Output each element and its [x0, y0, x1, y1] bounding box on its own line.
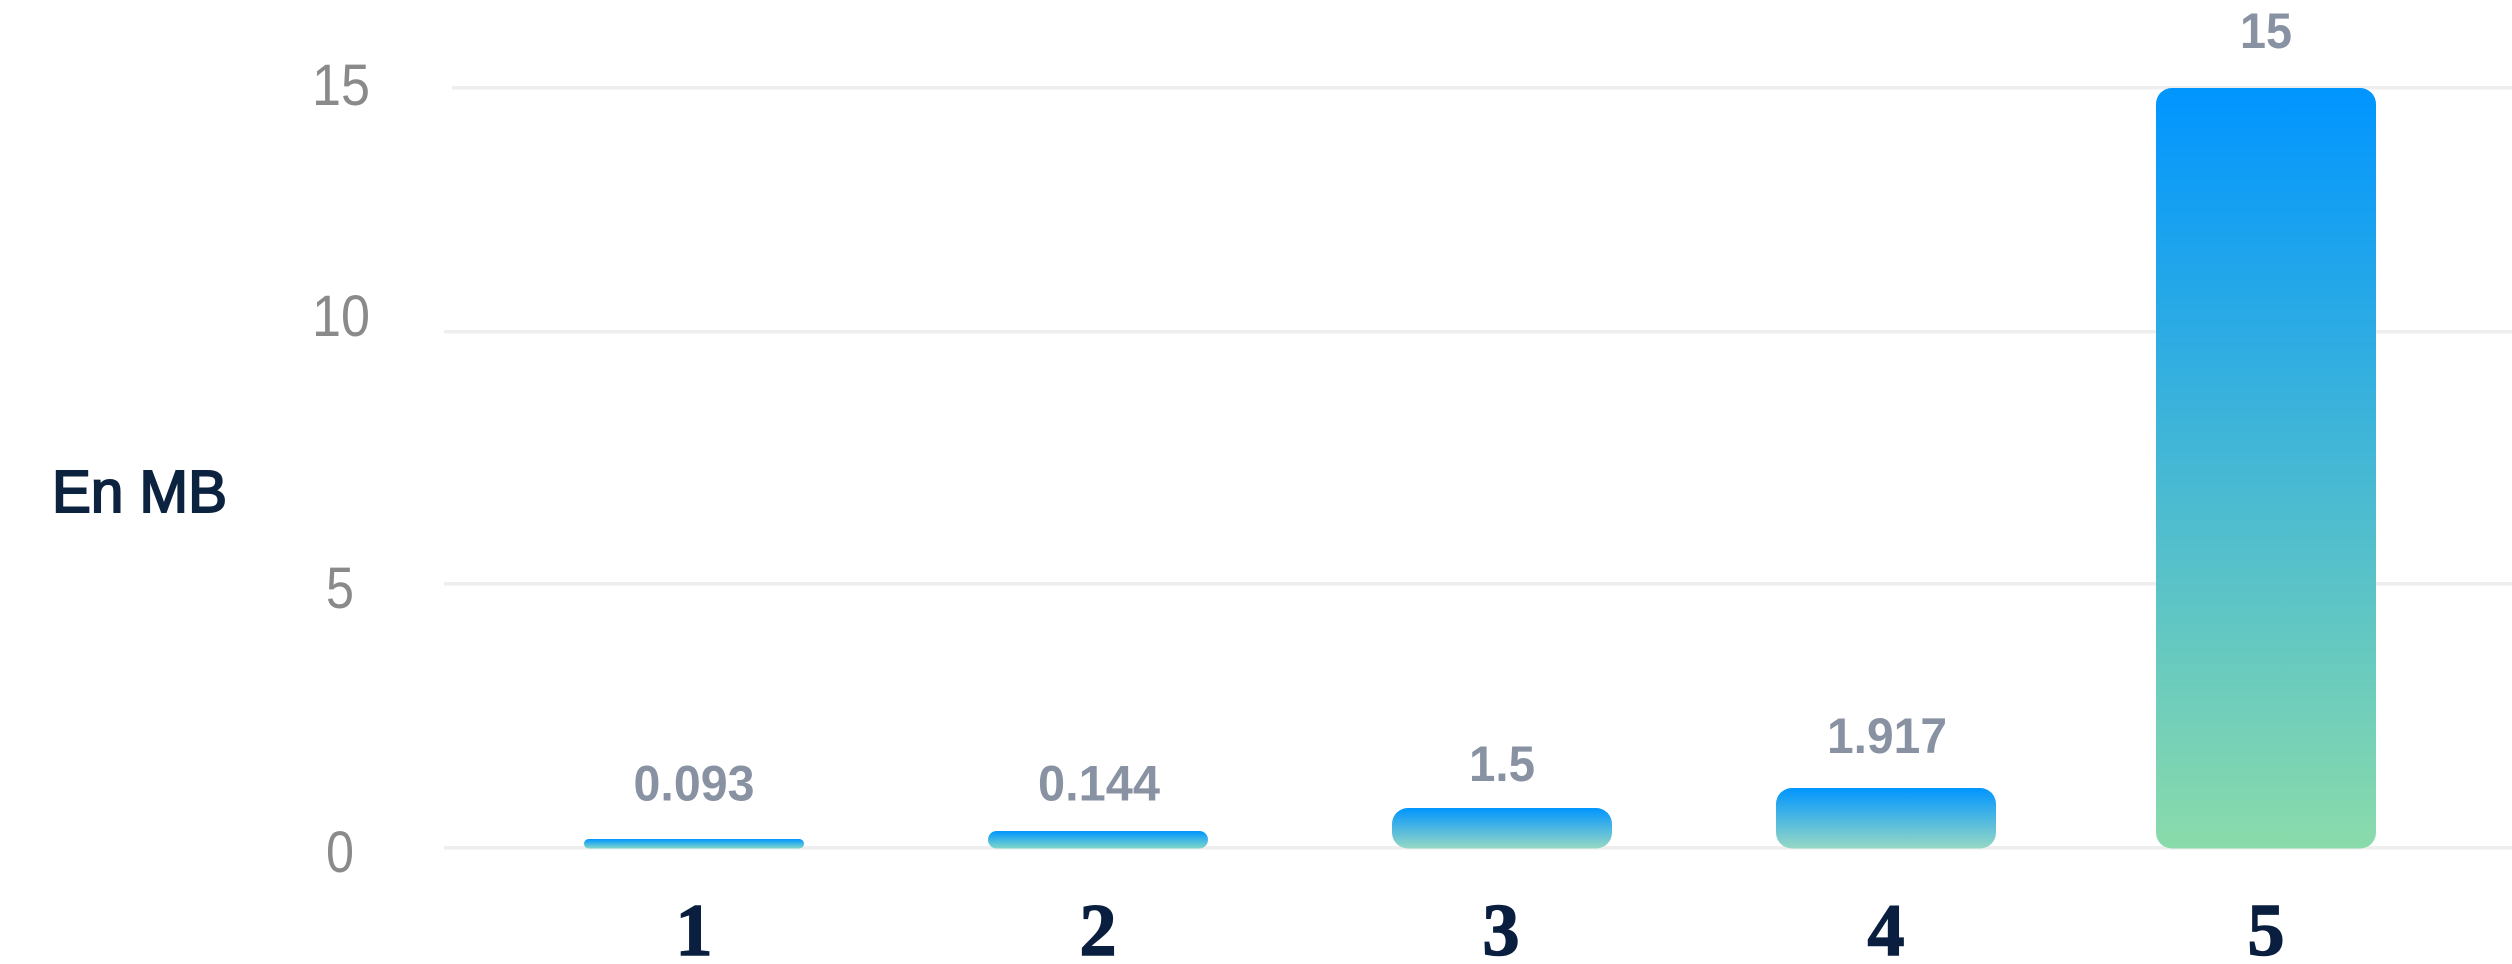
y axis labels: 15	[312, 53, 370, 118]
y axis labels: 10	[312, 284, 370, 349]
y axis labels: 5	[326, 556, 354, 621]
y axis title: En MB	[52, 459, 227, 525]
y axis labels: 0	[326, 820, 354, 885]
bar 5	[2156, 3, 2376, 964]
bar 5: 15	[2240, 3, 2292, 59]
bar 1	[584, 756, 804, 964]
bar 4: 1.917	[1827, 708, 1947, 764]
bar 3: 1.5	[1469, 736, 1535, 792]
bar 2: 0.144	[1038, 756, 1160, 812]
bar 1: 0.093	[634, 756, 754, 812]
bar 3	[1392, 736, 1612, 964]
bar 2	[988, 756, 1208, 964]
y axis labels	[312, 53, 370, 885]
bar 4	[1776, 708, 1996, 964]
